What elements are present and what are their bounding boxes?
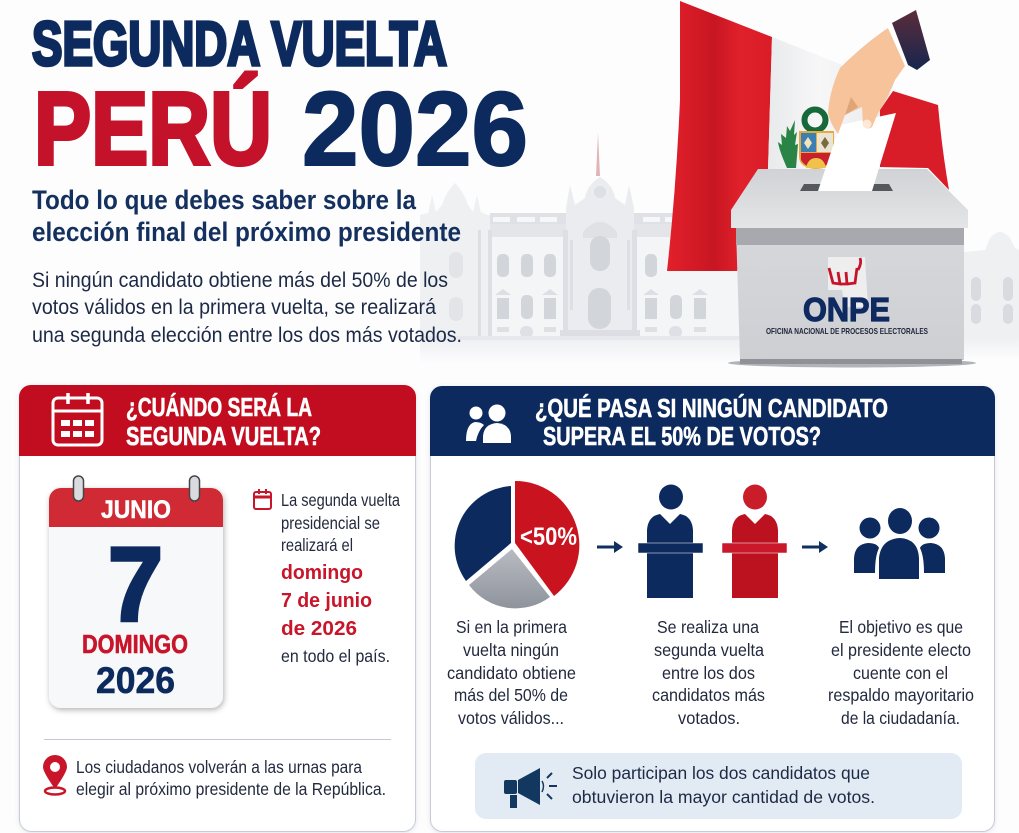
step 1 text: candidato obtiene (447, 663, 576, 683)
date description: en todo el país. (281, 646, 390, 666)
step 3 text: el presidente electo (831, 640, 971, 660)
panel: when is the runoff (19, 385, 416, 832)
icon: red candidate at podium (722, 484, 787, 598)
pie chart: <50% (520, 523, 577, 551)
hero: hand (828, 10, 930, 134)
icon: calendar (53, 393, 102, 445)
icon: two people (466, 404, 511, 443)
callout text (572, 763, 875, 807)
panel heading: ¿CUÁNDO SERÁ LA (126, 392, 312, 422)
icon: location pin (43, 755, 67, 794)
intro paragraph: una segunda elección entre los dos más votados. (32, 324, 462, 347)
citizens note (76, 757, 386, 799)
title: PERÚ (34, 71, 272, 186)
ONPE logo: OFICINA NACIONAL DE PROCESOS ELECTORALES (766, 326, 928, 336)
step 1 text: Si en la primera (456, 617, 567, 637)
background: government palace (420, 133, 1019, 364)
panel header: navy (430, 386, 995, 456)
date description (281, 490, 400, 666)
ONPE logo: ONPE (803, 291, 890, 328)
panel heading (126, 392, 321, 451)
panel heading: SEGUNDA VUELTA? (126, 421, 321, 451)
subtitle: elección final del próximo presidente (32, 217, 461, 247)
step 3 text: El objetivo es que (839, 617, 963, 637)
step 2 text: votados. (678, 708, 740, 728)
icon: navy candidate at podium (638, 484, 703, 598)
calendar page: 7 June 2026: DOMINGO (82, 629, 188, 659)
intro paragraph (32, 269, 462, 347)
intro paragraph: Si ningún candidato obtiene más del 50% de los (32, 269, 448, 292)
step 1 text: votos válidos... (458, 708, 564, 728)
step 2 text: segunda vuelta (654, 640, 764, 660)
hero: ballot paper (818, 113, 896, 191)
panel heading: ¿QUÉ PASA SI NINGÚN CANDIDATO (535, 393, 888, 423)
date description: de 2026 (281, 617, 357, 640)
subtitle (32, 185, 461, 247)
step 3 text (828, 617, 974, 728)
pie chart (455, 481, 579, 608)
icon: megaphone (504, 768, 557, 808)
hero: ballot box (728, 169, 976, 368)
title: 2026 (302, 71, 528, 188)
citizens note: Los ciudadanos volverán a las urnas para (76, 757, 362, 777)
step 2 text: entre los dos (662, 663, 755, 683)
ONPE logo (766, 257, 928, 336)
step 3 text: respaldo mayoritario (828, 685, 974, 705)
hero: Peruvian flag (667, 1, 949, 271)
citizens note: elegir al próximo presidente de la República. (76, 779, 386, 799)
date description: realizará el (281, 535, 353, 555)
calendar page: 7 June 2026 (49, 476, 223, 708)
icon: small calendar (254, 489, 271, 509)
calendar page: 7 June 2026: 2026 (96, 660, 175, 701)
step 2 text: candidatos más (652, 685, 765, 705)
date description: domingo (281, 561, 363, 584)
callout (475, 753, 962, 819)
icon: coat of arms (778, 110, 834, 169)
callout text: obtuvieron la mayor cantidad de votos. (572, 787, 875, 807)
step 1 text: más del 50% de (454, 685, 568, 705)
arrow (597, 541, 623, 553)
intro paragraph: votos válidos en la primera vuelta, se realizará (32, 296, 436, 319)
panel: what if no candidate exceeds 50% (430, 386, 995, 832)
subtitle: Todo lo que debes saber sobre la (32, 185, 417, 215)
calendar page: 7 June 2026: JUNIO (101, 496, 171, 524)
callout text: Solo participan los dos candidatos que (572, 763, 870, 783)
arrow (802, 541, 828, 553)
date description: La segunda vuelta (281, 490, 400, 510)
panel header: red (19, 385, 416, 456)
icon: citizens group (854, 508, 945, 579)
step 1 text: vuelta ningún (463, 640, 559, 660)
date description: 7 de junio (281, 589, 372, 612)
step 3 text: cuente con el (853, 663, 948, 683)
panel heading (535, 393, 888, 451)
step 1 text (447, 617, 576, 728)
panel heading: SUPERA EL 50% DE VOTOS? (543, 421, 821, 451)
step 2 text: Se realiza una (657, 617, 759, 637)
calendar page: 7 June 2026: 7 (108, 526, 163, 644)
title (32, 10, 528, 188)
title: SEGUNDA VUELTA (32, 10, 447, 79)
date description: presidencial se (281, 513, 380, 533)
step 2 text (652, 617, 765, 728)
step 3 text: de la ciudadanía. (841, 708, 960, 728)
